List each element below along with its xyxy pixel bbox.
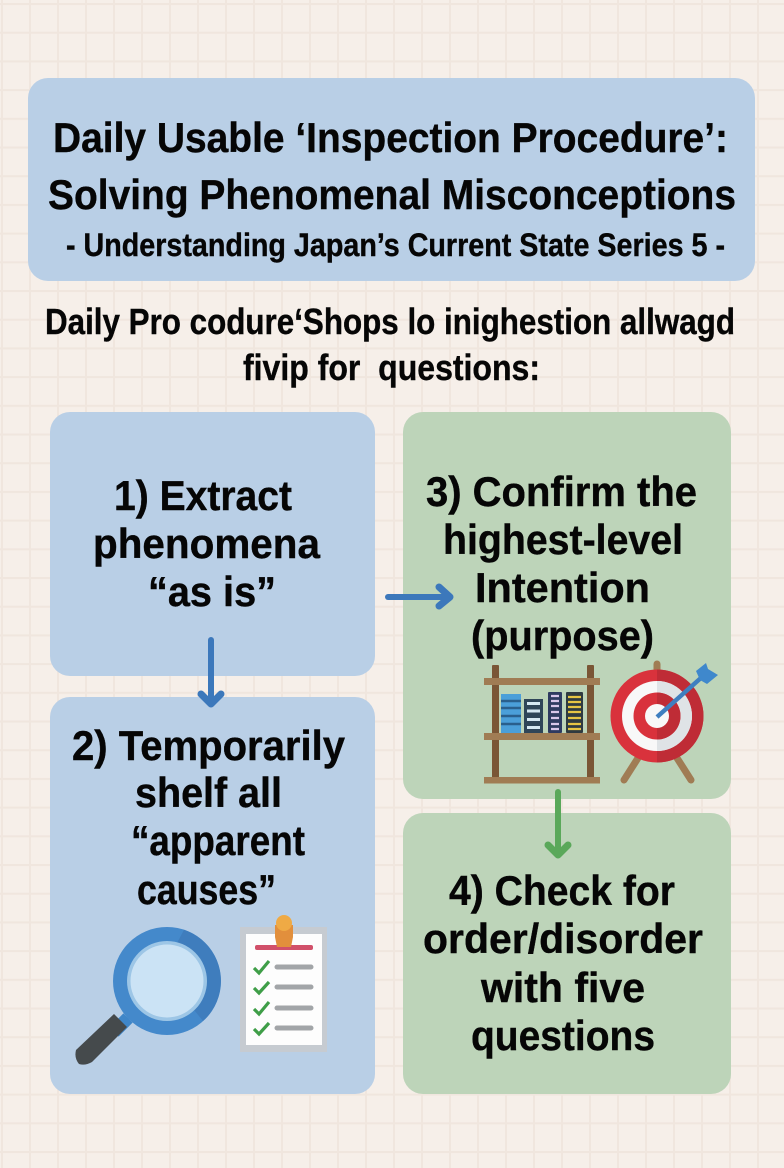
step 2 text: 2) Temporarily [72,722,346,769]
step 2 text: causes” [137,866,276,913]
step 2 text [72,722,346,913]
step 1 text: phenomena [93,520,321,567]
step 3 text: 3) Confirm the [426,468,697,515]
panel: step 3 [403,412,731,799]
subtitle: - Understanding Japan’s Current State Series 5 - [66,227,725,263]
step 4 text: 4) Check for [449,867,675,914]
step 4 text [423,867,703,1059]
step 4 text: order/disorder [423,915,703,962]
panel: step 1 [50,412,375,676]
title [48,114,736,218]
arrow: step 3 to step 4 [548,792,568,855]
step 1 text [93,472,321,615]
icon: target with arrow [610,663,718,780]
step 1 text: “as is” [148,568,276,615]
title: Solving Phenomenal Misconceptions [48,171,736,218]
arrow: step 1 to step 3 [388,587,450,606]
arrow: step 1 to step 2 [201,640,221,704]
step 4 text: questions [471,1012,655,1059]
title: Daily Usable ‘Inspection Procedure’: [53,114,728,161]
step 3 text [426,468,697,659]
panel: step 4 [403,813,731,1094]
step 3 text: Intention [475,564,650,611]
step 3 text: (purpose) [471,612,654,659]
panel: title banner [28,78,755,281]
step 2 text: shelf all [135,769,282,816]
step 2 text: “apparent [131,817,305,864]
step 4 text: with five [480,964,645,1011]
intro text [45,301,735,388]
intro text: fivip for questions: [243,347,540,388]
step 3 text: highest-level [443,516,683,563]
icon: checklist clipboard [240,915,327,1052]
panel: step 2 [50,697,375,1094]
icon: bookshelf [484,665,600,784]
step 1 text: 1) Extract [114,472,292,519]
icon: magnifying glass [75,927,221,1065]
